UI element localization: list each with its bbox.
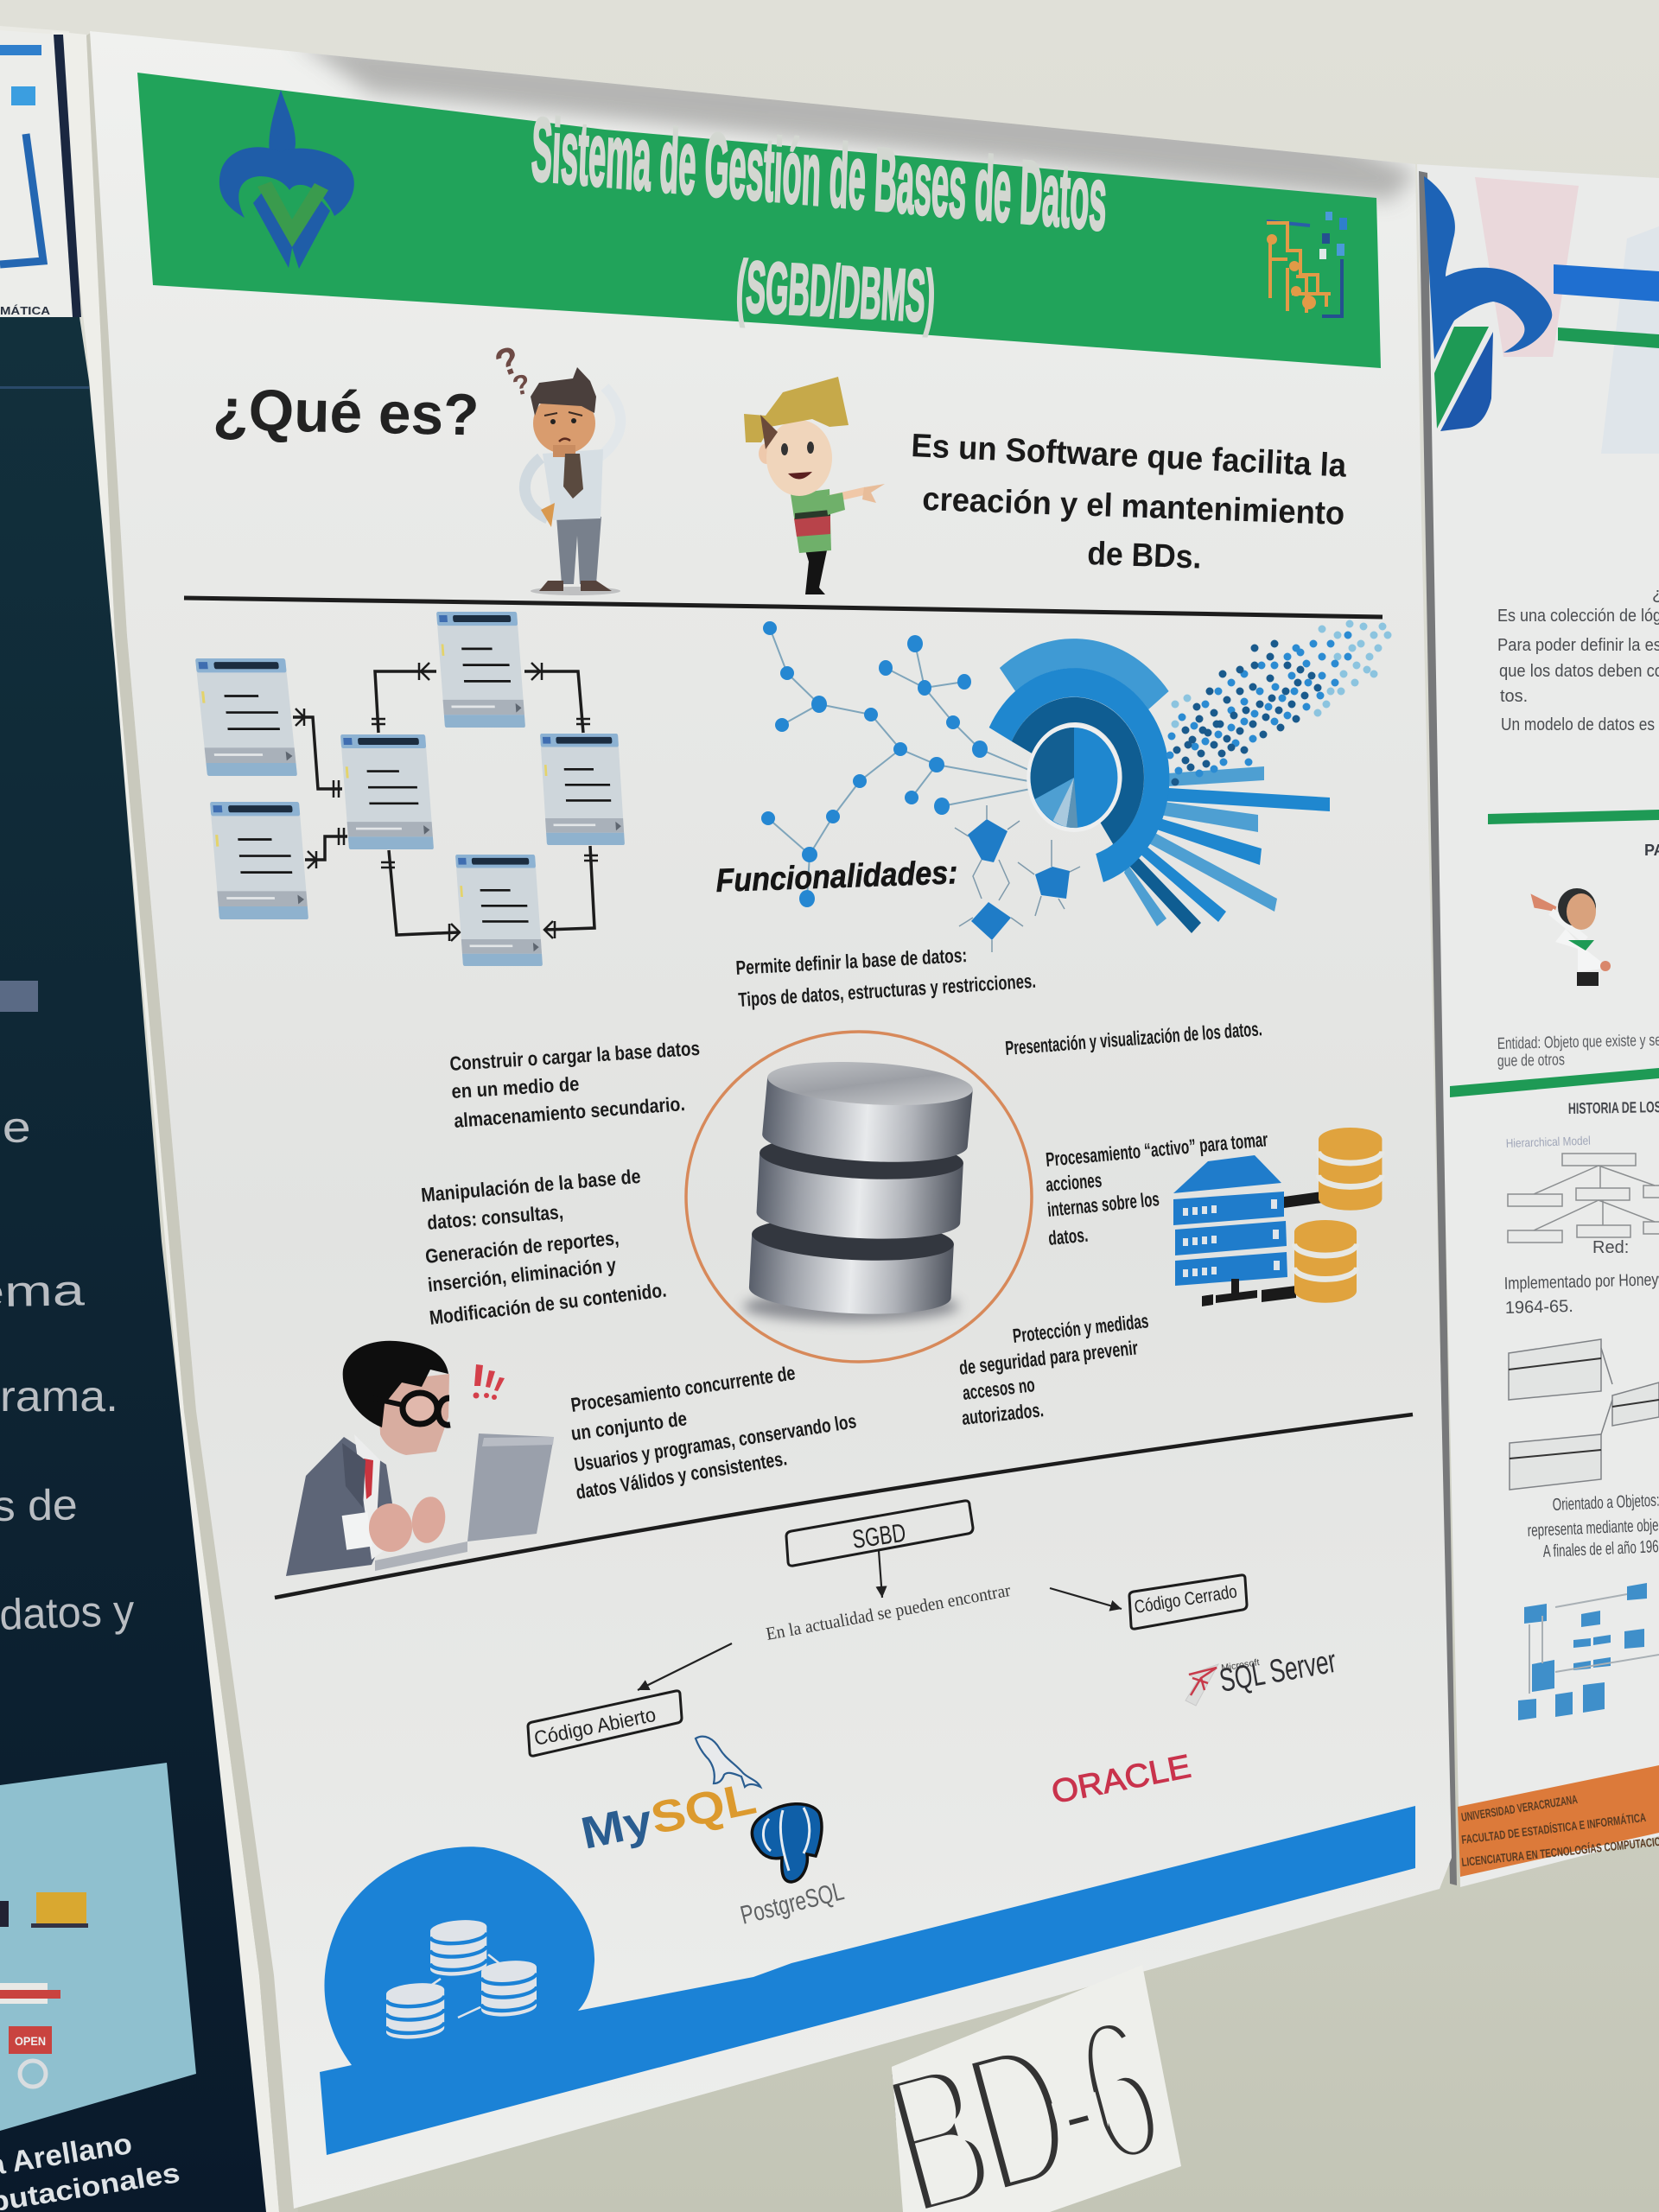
- arrow: SGBD to text: [879, 1551, 882, 1598]
- circuit icon: [1267, 212, 1347, 316]
- entity relationship diagram: [195, 612, 625, 966]
- definition text: de BDs.: [1087, 536, 1202, 576]
- definition text: creación y el mantenimiento: [922, 481, 1345, 532]
- box: codigo abierto: Código Abierto: [532, 1703, 658, 1750]
- definition text: [911, 428, 1348, 576]
- red model text: Red:: [1592, 1238, 1629, 1257]
- right poster text: [1497, 585, 1659, 734]
- text: proteccion: Protección y medidas: [1012, 1309, 1150, 1347]
- server and databases icon: [1173, 1128, 1382, 1306]
- table 5: [210, 802, 308, 919]
- text: procesamiento concurrente: Procesamiento concurrente de: [569, 1361, 797, 1416]
- text: construir: en un medio de: [451, 1072, 580, 1103]
- header banner: [137, 73, 1381, 368]
- hexagon cluster: [955, 805, 1080, 952]
- logo: PostgreSQL elephant: [752, 1804, 822, 1882]
- object model blue boxes: [1518, 1583, 1659, 1720]
- radial rays: [1124, 766, 1330, 933]
- orange footer: UNIVERSIDAD VERACRUZANA: [1460, 1792, 1579, 1824]
- text: procesamiento concurrente: [569, 1361, 858, 1503]
- text: manipulacion: datos: consultas,: [426, 1200, 564, 1234]
- text: proteccion: [958, 1309, 1150, 1429]
- logo: SQL Server: SQL Server: [1217, 1643, 1339, 1700]
- university logo: [219, 90, 354, 269]
- text: manipulacion: Modificación de su contenido.: [429, 1278, 668, 1329]
- text: procesamiento activo: Procesamiento “activo” para tomar: [1045, 1128, 1268, 1171]
- hierarchical model diagram: [1506, 1134, 1659, 1243]
- text: manipulacion: inserción, eliminación y: [427, 1253, 617, 1296]
- text: permite definir: Permite definir la base de datos:: [735, 944, 968, 979]
- avatar: [1535, 888, 1611, 986]
- database stack icon: [386, 1918, 537, 2041]
- arrow: to codigo abierto: [638, 1643, 732, 1690]
- left neighbouring poster: OPEN: [15, 2034, 46, 2048]
- relational tables: [1509, 1339, 1659, 1490]
- illustration: confused man: ?: [490, 338, 526, 385]
- data visualization graphic: [761, 621, 1388, 952]
- text: presentacion: Presentación y visualización de los datos.: [1004, 1017, 1263, 1059]
- orange footer: [1458, 1765, 1659, 1877]
- text: proteccion: de seguridad para prevenir: [958, 1336, 1139, 1379]
- text: manipulacion: Manipulación de la base de: [420, 1165, 641, 1206]
- database cylinder in orange circle: [686, 1032, 1032, 1362]
- text: permite definir: Tipos de datos, estructuras y restricciones.: [738, 969, 1037, 1011]
- text: proteccion: accesos no: [962, 1373, 1036, 1404]
- arrow: to codigo cerrado: [1050, 1588, 1122, 1609]
- left neighbouring poster: MÁTICA: [0, 304, 51, 317]
- middle disc: [755, 1132, 964, 1243]
- text: en la actualidad: En la actualidad se pueden encontrar: [765, 1580, 1012, 1644]
- bottom disc: [748, 1213, 955, 1319]
- left neighbouring poster: [0, 26, 279, 2212]
- logo: MySQL dolphin: [696, 1737, 760, 1787]
- heading: funcionalidades: Funcionalidades:: [715, 855, 958, 899]
- network graph: [761, 621, 1037, 907]
- logo: SQL Server: [1185, 1643, 1339, 1706]
- illustration: confused man: [490, 338, 620, 595]
- text: construir: almacenamiento secundario.: [453, 1092, 686, 1132]
- text: procesamiento activo: acciones: [1045, 1168, 1103, 1196]
- right neighbouring poster: [1417, 164, 1659, 1887]
- sunburst rings: [989, 639, 1169, 882]
- logo: Oracle: ORACLE: [1049, 1749, 1194, 1811]
- top disc: [761, 1057, 974, 1167]
- box: codigo cerrado: Código Cerrado: [1133, 1581, 1238, 1618]
- table 6: [455, 855, 543, 966]
- text: procesamiento activo: [1045, 1128, 1268, 1249]
- object oriented text: [1527, 1491, 1659, 1561]
- right neighbouring poster: gue de otros: [1497, 1051, 1565, 1071]
- blue footer band with circle: [320, 1806, 1415, 2155]
- text: procesamiento concurrente: un conjunto de: [569, 1407, 688, 1445]
- red model text: [1504, 1238, 1659, 1318]
- heading: que es: ¿Qué es?: [213, 377, 480, 448]
- concept map: SGBD box: [786, 1501, 973, 1566]
- hierarchical model diagram: Hierarchical Model: [1506, 1134, 1591, 1150]
- text: manipulacion: [420, 1165, 668, 1329]
- text: permite definir: [735, 944, 1037, 1011]
- text: procesamiento activo: internas sobre los: [1046, 1187, 1160, 1221]
- table 4: [540, 734, 625, 845]
- concept map: SGBD box: SGBD: [850, 1519, 907, 1554]
- text: construir: [449, 1037, 701, 1132]
- text: proteccion: autorizados.: [961, 1398, 1045, 1429]
- text: procesamiento activo: datos.: [1047, 1224, 1089, 1249]
- red model text: 1964-65.: [1505, 1297, 1573, 1318]
- logo: MySQL wordmark: MySQL: [576, 1773, 760, 1859]
- illustration: confused man: ?: [510, 368, 533, 402]
- header banner: (SGBD/DBMS): [734, 245, 938, 337]
- box: codigo cerrado: [1129, 1575, 1247, 1629]
- illustration: pointing boy: [744, 377, 885, 594]
- table 3: [340, 734, 434, 849]
- left neighbouring poster: rama.: [0, 1372, 118, 1421]
- logo: PostgreSQL wordmark: PostgreSQL: [738, 1877, 847, 1930]
- text: manipulacion: Generación de reportes,: [424, 1226, 620, 1268]
- table 2: [436, 612, 525, 728]
- text: procesamiento concurrente: Usuarios y programas, conservando los: [573, 1409, 858, 1476]
- definition text: Es un Software que facilita la: [911, 428, 1348, 485]
- logo: SQL Server: Microsoft: [1221, 1657, 1261, 1674]
- text: procesamiento concurrente: datos Válidos y consistentes.: [575, 1446, 789, 1503]
- text: construir: Construir o cargar la base datos: [449, 1037, 701, 1075]
- right poster text: tos.: [1500, 687, 1528, 706]
- box: codigo abierto: [528, 1691, 682, 1756]
- table 1: [195, 658, 297, 776]
- scatter dots: [1170, 624, 1388, 782]
- illustration: surprised man at laptop: [286, 1341, 554, 1576]
- right poster logo: [1424, 176, 1659, 454]
- left neighbouring poster: datos y: [0, 1586, 135, 1639]
